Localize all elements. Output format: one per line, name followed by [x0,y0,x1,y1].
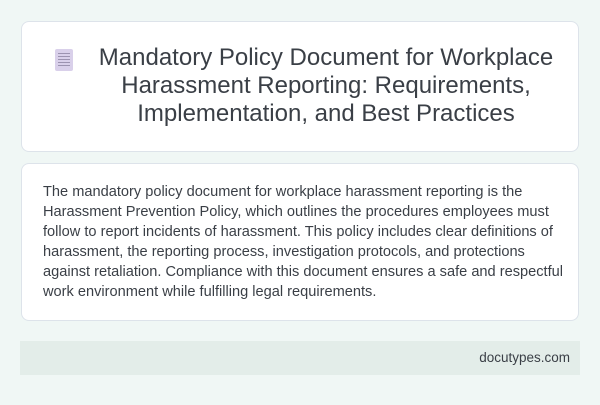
footer text: docutypes.com [479,350,570,365]
title: Mandatory Policy Document for Workplace Harassment Reporting: Requirements, Implementation, and Best Practices [99,44,553,127]
icon: document [55,49,73,71]
panel: title card [21,21,579,152]
footer [20,341,580,375]
panel: description [21,163,579,321]
text block: The mandatory policy document for workplace harassment reporting is the Harassment Prevention Policy, which outlines the procedures employees must follow to report incidents of harassment. This policy includes clear definitions of harassment, the reporting process, investigation protocols, and protections against retaliation. Compliance with this document ensures a safe and respectful work environment while fulfilling legal requirements. [43,184,563,300]
